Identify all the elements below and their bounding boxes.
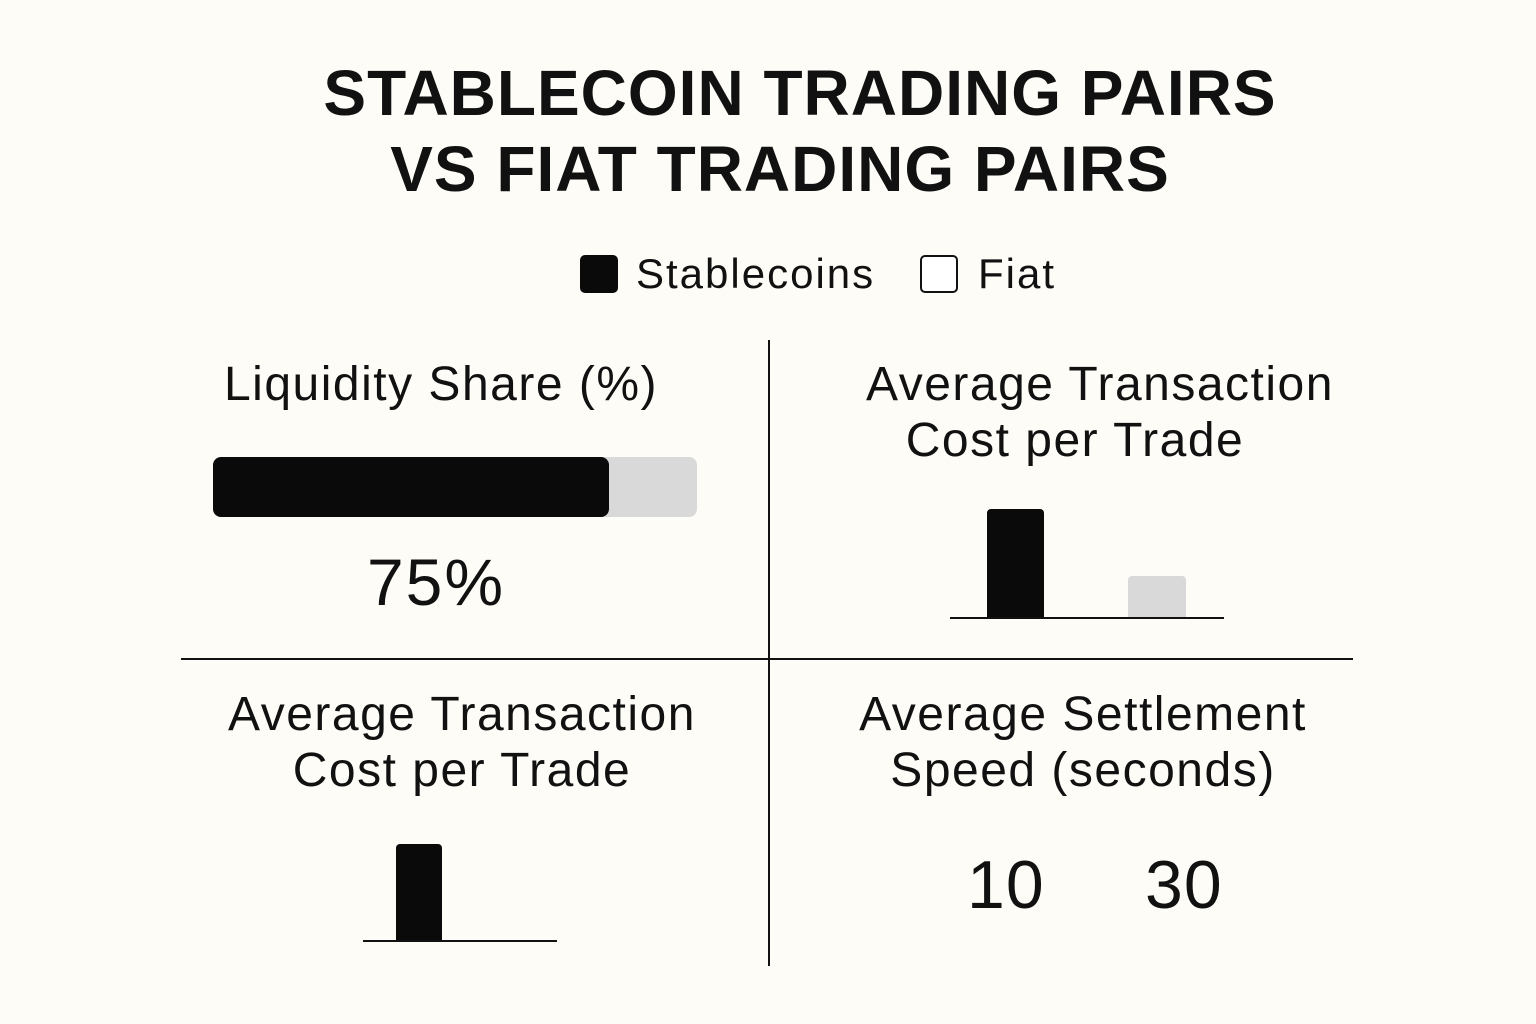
heading: Average Transaction [228, 688, 696, 741]
title [323, 57, 1277, 205]
legend: Fiat [978, 250, 1056, 297]
heading [866, 358, 1334, 467]
heading: Cost per Trade [293, 744, 631, 797]
bar chart [950, 509, 1224, 619]
title: VS FIAT TRADING PAIRS [390, 133, 1170, 205]
bar chart [363, 844, 557, 942]
values: 30 [1145, 847, 1223, 923]
bar: liquidity [213, 457, 697, 517]
panel: liquidity share [213, 358, 697, 619]
heading: Speed (seconds) [890, 744, 1276, 797]
heading [228, 688, 696, 797]
heading: Cost per Trade [906, 414, 1244, 467]
legend: stablecoins [580, 255, 618, 293]
heading: Average Transaction [866, 358, 1334, 411]
values [967, 847, 1223, 923]
legend [580, 250, 1056, 297]
panel: settlement speed [859, 688, 1307, 923]
heading: Average Settlement [859, 688, 1307, 741]
panel: transaction cost (top right) [866, 358, 1334, 619]
value: 75%: 75% [367, 545, 505, 619]
heading [859, 688, 1307, 797]
panel: transaction cost (bottom left) [228, 688, 696, 942]
legend: Stablecoins [636, 250, 875, 297]
heading: liquidity share: Liquidity Share (%) [224, 358, 658, 411]
values: 10 [967, 847, 1045, 923]
title: STABLECOIN TRADING PAIRS [323, 57, 1277, 129]
